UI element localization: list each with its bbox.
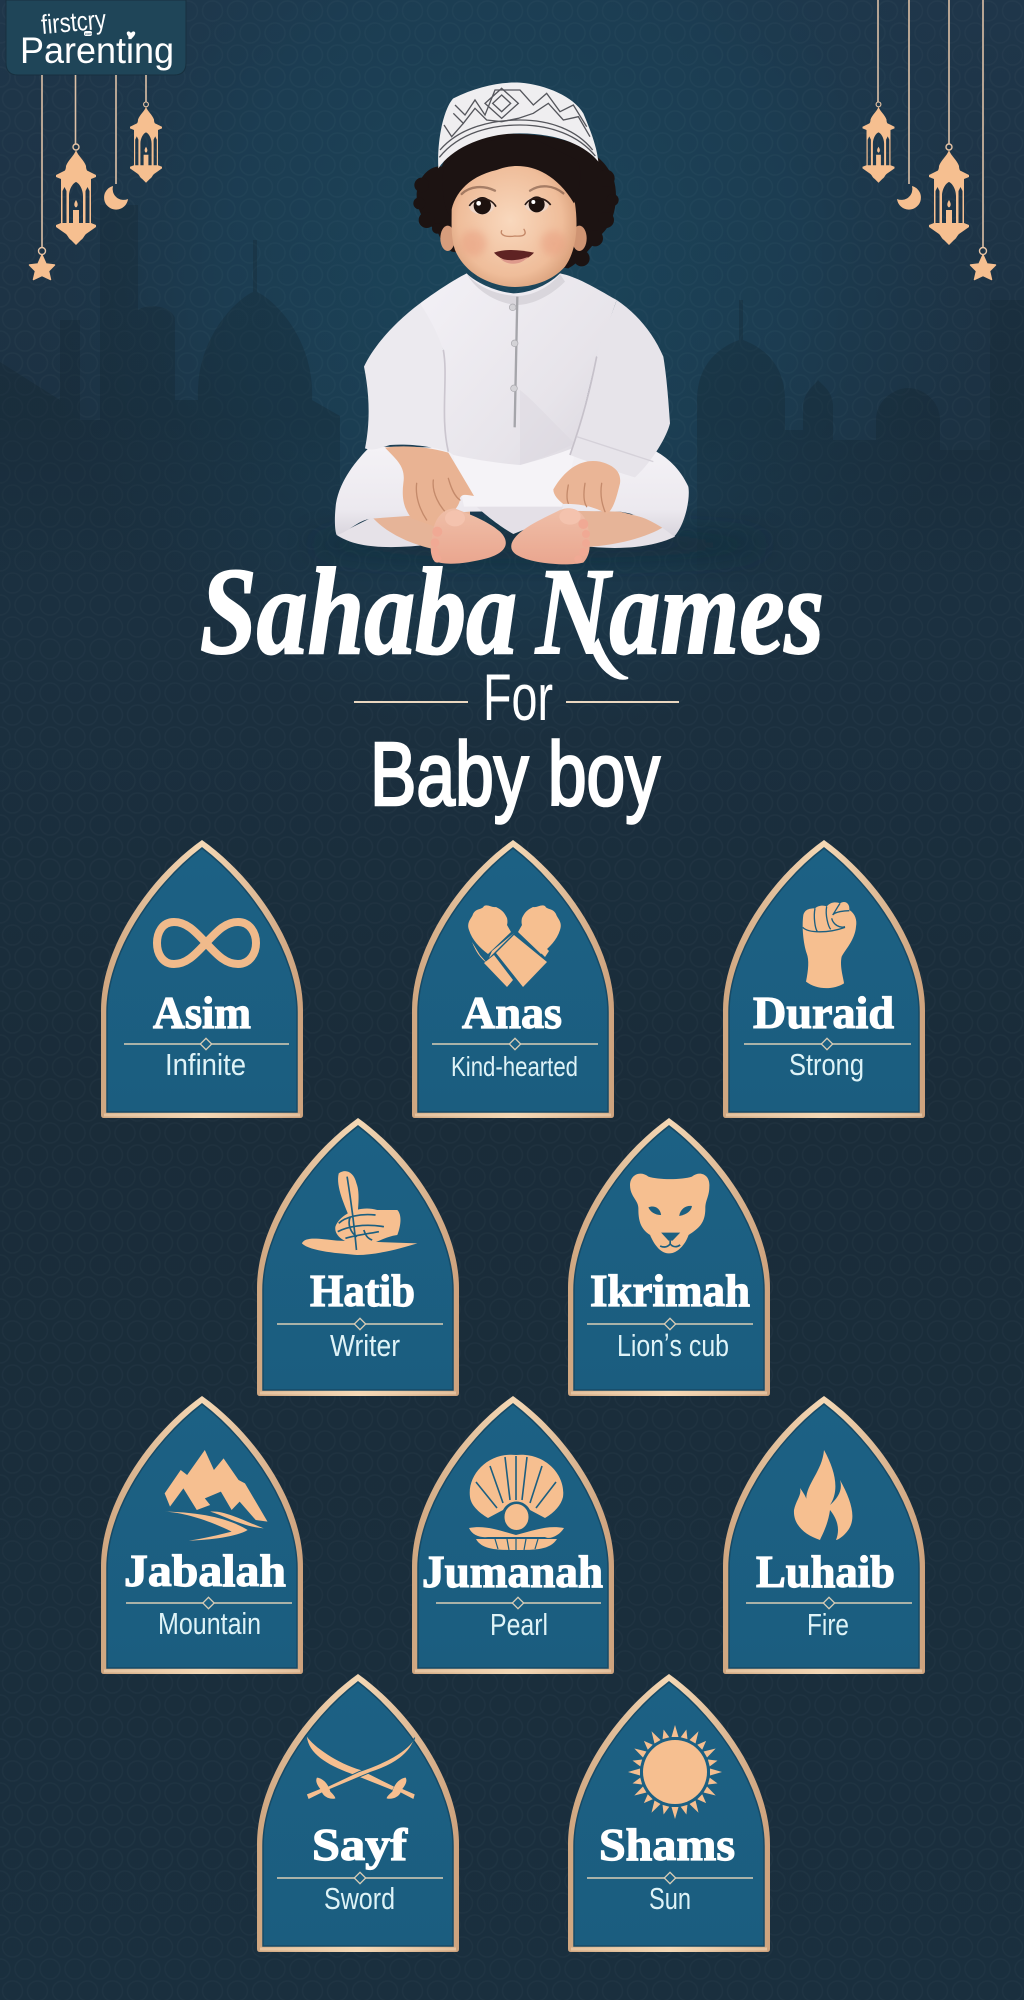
- card: Luhaib: [723, 1396, 925, 1674]
- meaning: Writer: [330, 1328, 400, 1363]
- meaning: Mountain: [158, 1606, 261, 1641]
- placket: [515, 297, 517, 427]
- ground shadow under baby: [310, 531, 770, 559]
- face: [452, 155, 577, 287]
- ears: [440, 226, 455, 251]
- divider: [277, 1318, 443, 1330]
- name: Hatib: [310, 1265, 415, 1316]
- meaning: Pearl: [490, 1607, 548, 1642]
- cap: [438, 83, 598, 168]
- card: Hatib: [257, 1118, 459, 1396]
- robe hem flaps: [337, 517, 435, 547]
- name: Luhaib: [756, 1546, 895, 1597]
- divider: [126, 1597, 292, 1609]
- divider: [744, 1038, 911, 1050]
- icon: fist: [803, 902, 856, 988]
- name: Jumanah: [422, 1546, 603, 1597]
- robe skirt: [335, 447, 689, 537]
- divider: [432, 1038, 598, 1050]
- meaning: Fire: [807, 1607, 849, 1642]
- card: Asim: [101, 840, 303, 1118]
- meaning: Sword: [324, 1881, 395, 1916]
- icon: mountain: [165, 1450, 267, 1541]
- icon: infinity: [157, 922, 256, 964]
- meaning: Strong: [789, 1047, 864, 1082]
- name: Jabalah: [124, 1545, 286, 1596]
- torso: [420, 273, 617, 507]
- icon: large lantern: [56, 144, 96, 245]
- icon: heart hands: [468, 905, 561, 987]
- name: Asim: [153, 987, 251, 1038]
- icon: sun: [628, 1725, 722, 1819]
- garment under: [477, 507, 563, 534]
- divider: [277, 1872, 443, 1884]
- title: Sahaba Names: Sahaba: [200, 543, 517, 680]
- icon: lion cub: [630, 1174, 709, 1253]
- logo: firstcry: firstcry: [40, 4, 108, 40]
- card: Sayf: [257, 1674, 459, 1952]
- title: Sahaba Names: [200, 543, 824, 680]
- hair back: [413, 134, 619, 268]
- icon: small lantern: [130, 102, 162, 183]
- name: Ikrimah: [590, 1265, 750, 1316]
- meaning: Lionʼs cub: [617, 1328, 729, 1363]
- hair bangs: [443, 135, 580, 217]
- legs: [372, 510, 470, 549]
- name: Anas: [462, 987, 562, 1038]
- left hand: [385, 446, 474, 527]
- card: Shams: [568, 1674, 770, 1952]
- nose: [501, 229, 525, 236]
- cheeks: [460, 230, 566, 257]
- left foot: [431, 508, 506, 564]
- icon: crescent: [104, 186, 128, 210]
- card: Duraid: [723, 840, 925, 1118]
- card: Anas: [412, 840, 614, 1118]
- subtitle: For: For: [483, 660, 553, 734]
- buttons: [509, 304, 518, 392]
- divider: [746, 1597, 912, 1609]
- left sleeve: [364, 303, 448, 452]
- divider: [124, 1038, 289, 1050]
- eyebrows: [462, 186, 563, 194]
- eyes: [469, 196, 551, 214]
- icon: crossed swords: [307, 1737, 415, 1799]
- logo: com pill: com: [85, 31, 93, 36]
- name: Duraid: [753, 987, 894, 1038]
- baby illustration: [335, 83, 689, 564]
- icon: large lantern right: [929, 144, 969, 245]
- meaning: Infinite: [165, 1047, 246, 1082]
- divider: [436, 1597, 601, 1609]
- icon: small lantern right: [862, 102, 894, 183]
- icon: star: [30, 248, 54, 280]
- right foot: [511, 508, 590, 564]
- mouth: [494, 250, 534, 264]
- meaning: Sun: [649, 1881, 691, 1916]
- skyline silhouette right: [697, 300, 1024, 620]
- collar: [467, 273, 565, 305]
- name: Shams: [599, 1819, 735, 1870]
- logo panel: [6, 0, 186, 75]
- skyline silhouette left: [0, 205, 340, 620]
- divider: [587, 1318, 753, 1330]
- meaning: Kind-hearted: [451, 1051, 578, 1082]
- subtitle: Baby boy: Baby boy: [370, 725, 660, 825]
- icon: crescent right: [897, 186, 921, 210]
- card: Jumanah: [412, 1396, 614, 1674]
- logo: Parenting: Parenting: [20, 30, 174, 71]
- icon: quill and hand: [302, 1171, 417, 1255]
- logo: heart: [127, 31, 135, 39]
- name: Sayf: [312, 1819, 408, 1870]
- card: Ikrimah: [568, 1118, 770, 1396]
- icon: star right: [970, 248, 996, 280]
- right hand: [553, 461, 620, 514]
- right sleeve: [570, 300, 670, 477]
- title: Sahaba Names: Names: [534, 543, 824, 680]
- icon: pearl shell: [469, 1455, 564, 1550]
- icon: flame: [794, 1450, 852, 1540]
- hanging decorations right: [862, 0, 996, 280]
- divider: [587, 1872, 753, 1884]
- hanging decorations left: [30, 75, 162, 280]
- card: Jabalah: [101, 1396, 303, 1674]
